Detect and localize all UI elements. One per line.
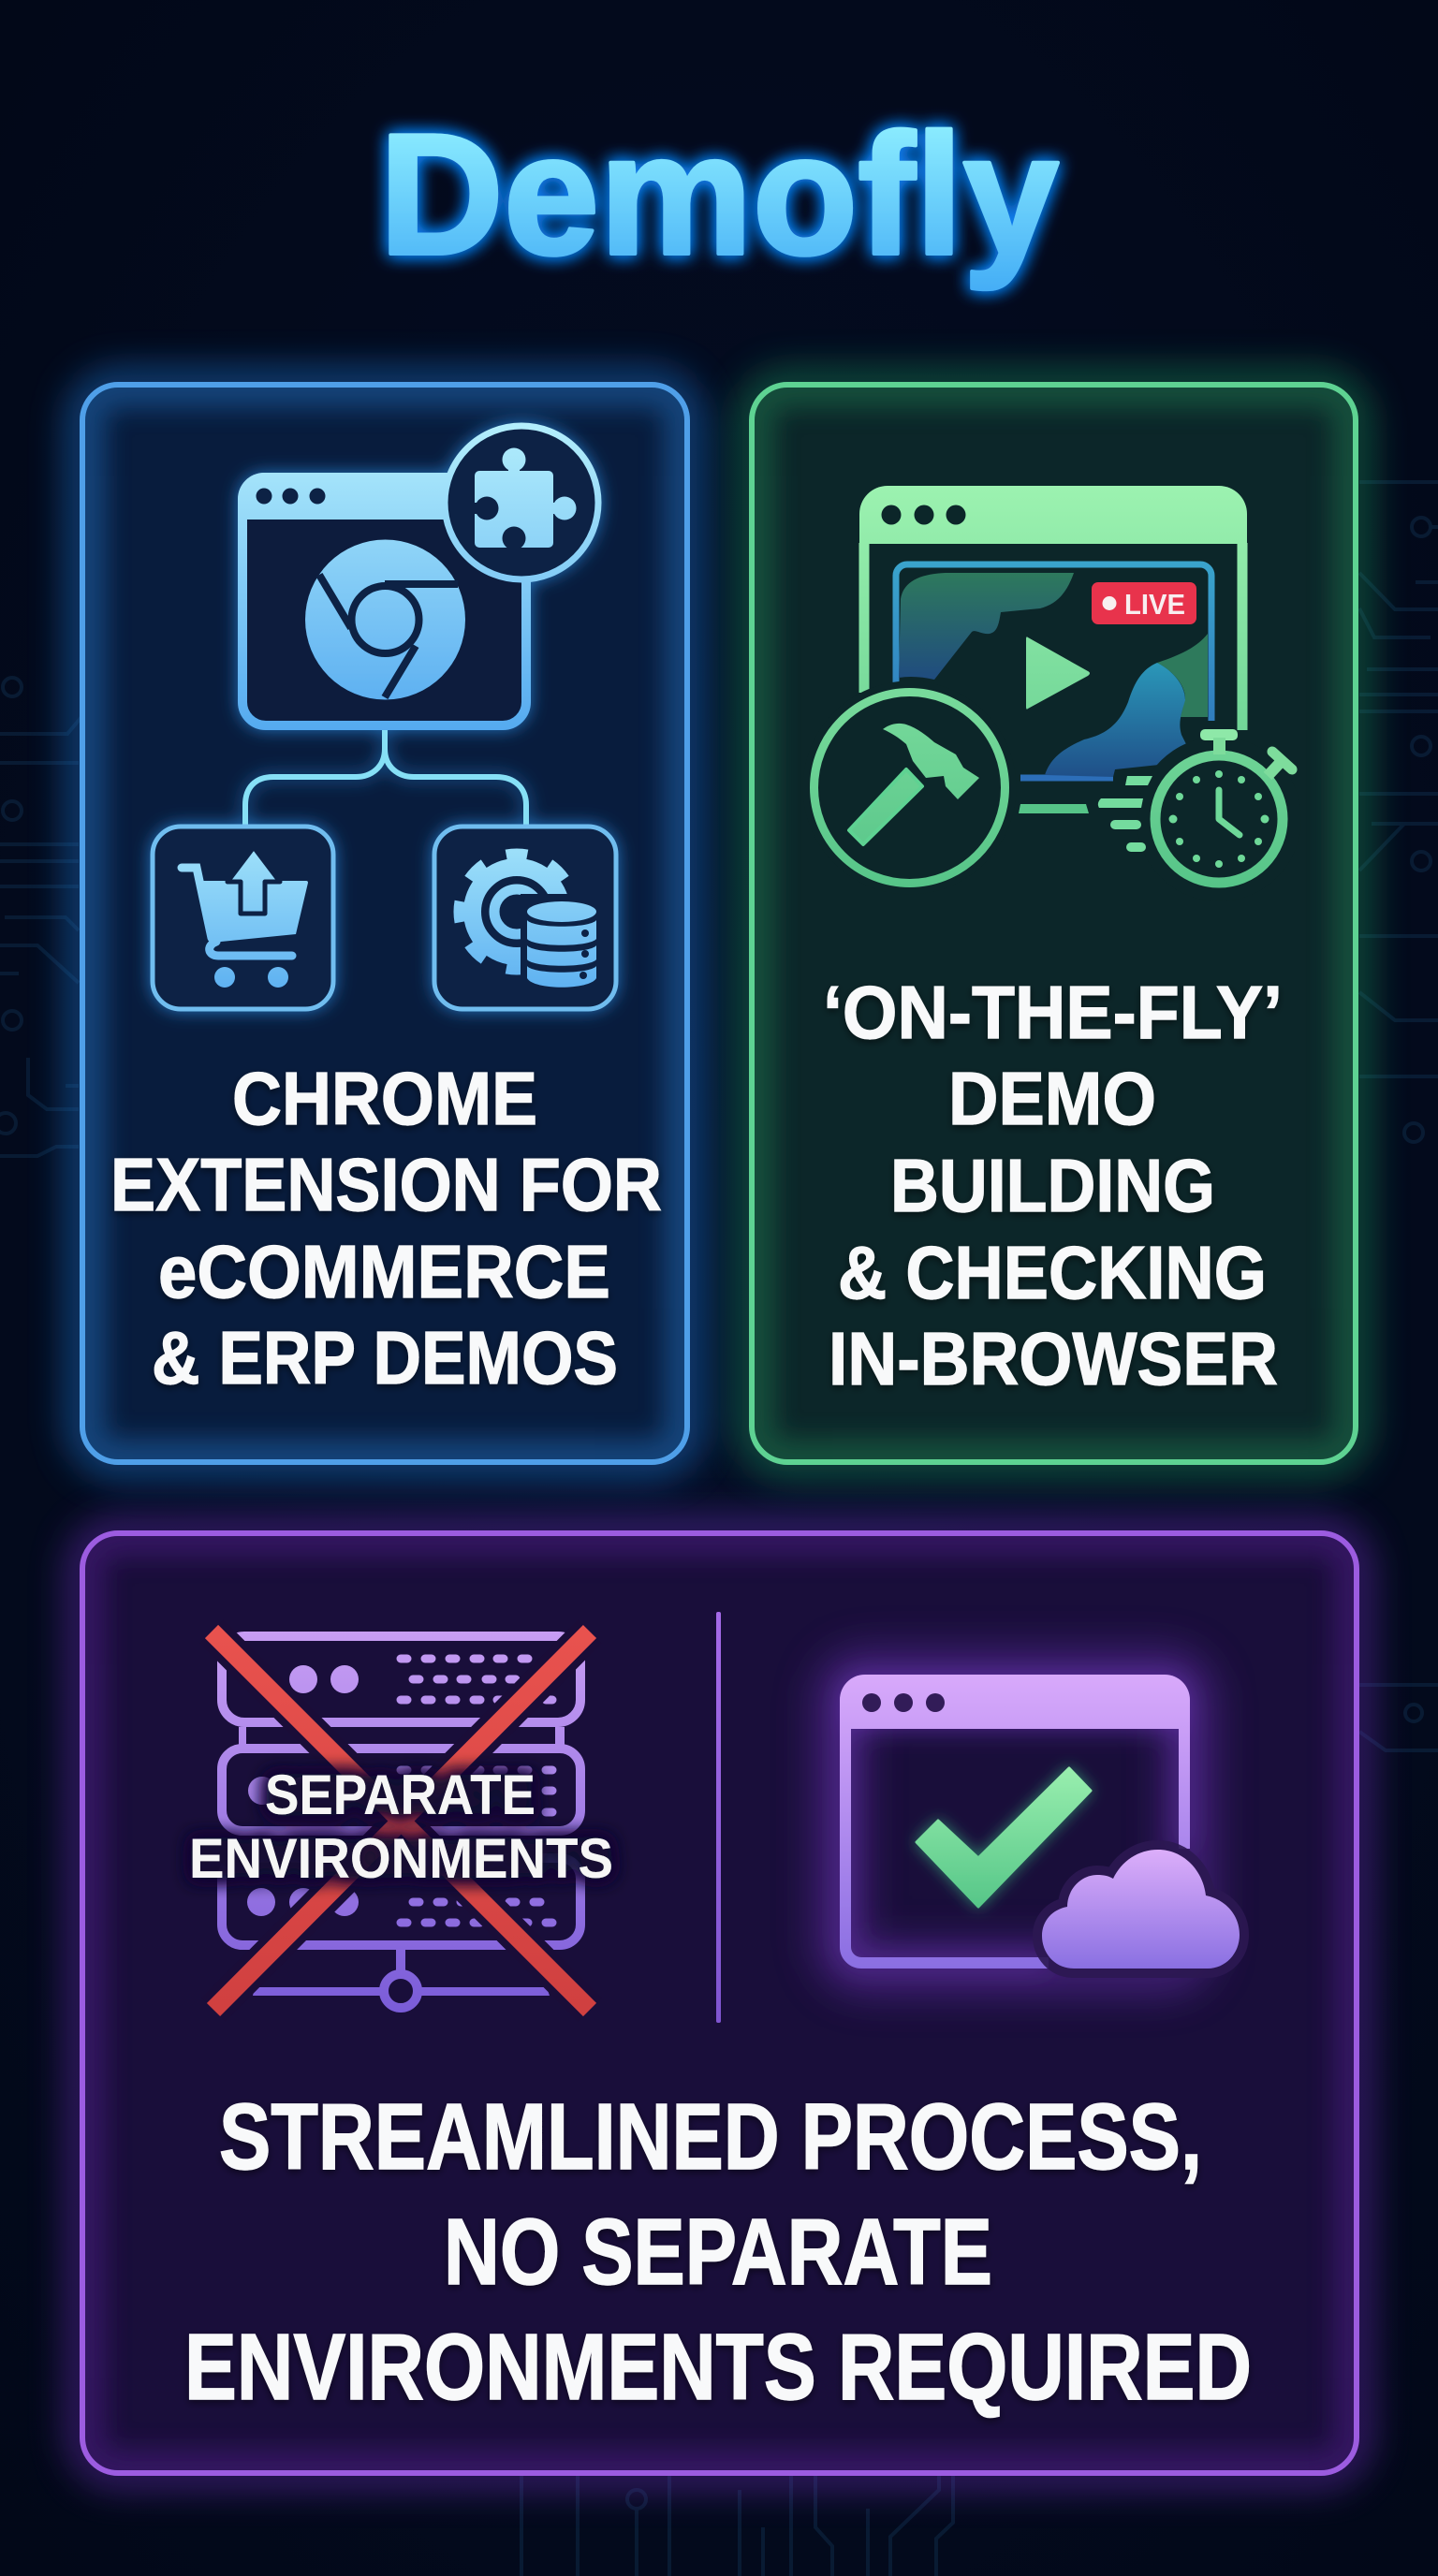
soft purple glow behind window (840, 1675, 1190, 1969)
icon: browser with live video (803, 486, 1301, 901)
icon: play triangle (1026, 637, 1090, 710)
icon: browser window with chrome logo and puzzle badge (153, 426, 616, 1009)
text: chrome extension label (110, 1057, 662, 1399)
text: on-the-fly label: IN-BROWSER (829, 1317, 1278, 1400)
video frame (896, 564, 1211, 778)
icon: crossed-out server rack (189, 1632, 613, 2010)
connector lines (245, 730, 526, 826)
text: separate environments (189, 1764, 613, 1890)
panel: streamlined process (82, 1533, 1357, 2473)
icon: shopping cart box (153, 827, 333, 1009)
text: streamlined process label: NO SEPARATE (444, 2200, 992, 2305)
panel: on-the-fly demo building (752, 385, 1356, 1462)
browser window frame (238, 473, 531, 725)
subtitle bar (1019, 804, 1089, 813)
text: chrome extension label: EXTENSION FOR (110, 1143, 662, 1226)
text: on-the-fly label: BUILDING (890, 1144, 1215, 1227)
server rack (222, 1636, 580, 2008)
browser window (840, 1675, 1190, 1963)
icon: gear and database box (434, 827, 616, 1009)
icon: hammer in circle (803, 681, 1017, 895)
icon: stopwatch with speed lines (1098, 729, 1301, 901)
icon: cloud (1042, 1850, 1240, 1969)
icon: chrome logo (305, 539, 465, 700)
text: chrome extension label: & ERP DEMOS (152, 1316, 618, 1399)
icon: live badge: LIVE (1124, 588, 1185, 621)
red cross (212, 1632, 590, 2010)
text: separate environments: SEPARATE (265, 1764, 536, 1826)
vertical divider (716, 1612, 721, 2023)
icon: live badge (1092, 582, 1196, 624)
text: streamlined process label (184, 2085, 1252, 2420)
browser frame (859, 486, 1247, 730)
panel: chrome extension (82, 385, 687, 1462)
text: streamlined process label: STREAMLINED PROCESS, (219, 2085, 1202, 2189)
icon: check mark (917, 1768, 1091, 1907)
icon: puzzle badge (445, 426, 598, 579)
title: Demofly (379, 97, 1059, 290)
text: separate environments: ENVIRONMENTS (189, 1827, 613, 1890)
text: on-the-fly label: DEMO (948, 1057, 1156, 1140)
text: chrome extension label: CHROME (232, 1057, 537, 1140)
text: streamlined process label: ENVIRONMENTS REQUIRED (184, 2315, 1252, 2420)
text: on-the-fly label (823, 971, 1283, 1400)
text: on-the-fly label: & CHECKING (838, 1231, 1267, 1314)
icon: browser with check and cloud (840, 1675, 1240, 1969)
text: chrome extension label: eCOMMERCE (158, 1230, 610, 1313)
text: on-the-fly label: ‘ON-THE-FLY’ (823, 971, 1283, 1054)
